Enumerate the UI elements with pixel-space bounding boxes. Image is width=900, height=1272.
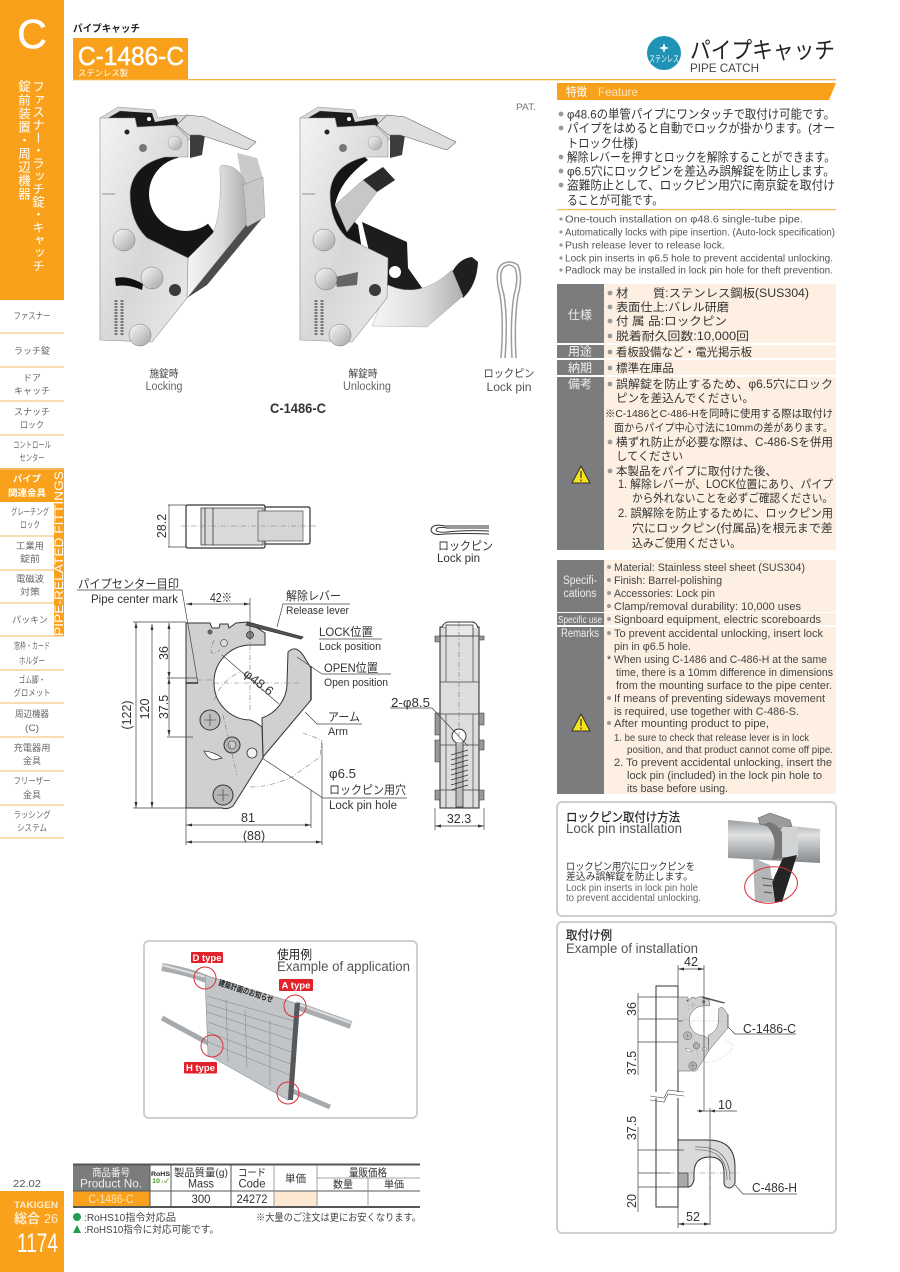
spec table english: To prevent accidental unlocking, insert lock (614, 628, 823, 640)
page title (690, 37, 835, 75)
sidebar navigation: 対策 (20, 586, 40, 597)
product category label: パイプキャッチ (73, 23, 140, 35)
spec table english: time, there is a 10mm difference in dimensions (616, 667, 833, 679)
photo captions: ロックピン (484, 367, 534, 380)
drawing: side view: 2-φ8.5 (391, 696, 430, 710)
footer page tab (0, 1191, 64, 1272)
callout: release lever (277, 589, 350, 627)
mini catch C-1486-C (678, 997, 732, 1071)
price table: 24272 (236, 1194, 268, 1206)
spec table english: Remarks (561, 628, 599, 640)
spec table japanese: ピンを差込んでください。 (616, 392, 754, 405)
table notes: ※大量のご注文は更にお安くなります。 (256, 1211, 421, 1224)
panel: installation example: 取付け例 (566, 928, 612, 942)
callout: open position: Open position (324, 677, 388, 689)
dimensions: 37.5 (625, 1116, 639, 1140)
panel: application example: Example of application (277, 959, 410, 974)
feature list japanese (559, 106, 835, 208)
photo captions: 施錠時 (150, 367, 179, 380)
spec table japanese (557, 284, 836, 550)
callout: pipe center mark: Pipe center mark (91, 592, 179, 606)
drawing: side view (390, 622, 484, 830)
callout: C-486-H: C-486-H (752, 1181, 797, 1195)
mounting board (650, 986, 686, 1207)
drawing: small lock pin: Lock pin (437, 551, 480, 565)
feature list japanese: 解除レバーを押すとロックを解除することができます。 (567, 150, 835, 164)
drawing: top view (155, 505, 316, 548)
dimensions: 36 (625, 1002, 639, 1016)
footer page tab: 1174 (17, 1228, 58, 1258)
drawing: front view with dimensions: (122) (120, 700, 134, 730)
sidebar navigation: グロメット (14, 687, 50, 698)
dimensions: 37.5 (625, 1051, 639, 1075)
callout: release lever: 解除レバー (286, 589, 341, 603)
sidebar navigation: ファスナー (14, 311, 50, 321)
sidebar navigation: 関連金具 (8, 487, 46, 498)
sidebar navigation: ドア (23, 373, 41, 383)
sidebar navigation: ロック (20, 520, 40, 530)
panel: lock pin installation: Lock pin inserts in lock pin hole (566, 883, 698, 894)
spec table japanese: 脱着耐久回数:10,000回 (616, 329, 749, 343)
callout: lock pin hole (262, 758, 407, 812)
sign board (205, 975, 300, 1100)
spec table english: Specific use (558, 615, 602, 626)
spec table japanese: 2. 誤解除を防止するために、ロックピン用 (618, 506, 833, 520)
sidebar navigation: フリーザー (14, 776, 50, 786)
sign board: 建築計画のお知らせ (217, 977, 275, 1005)
spec table japanese: 表面仕上:バレル研磨 (616, 300, 730, 314)
price table (73, 1164, 420, 1207)
sidebar navigation: 窓枠・カード (14, 640, 50, 651)
sidebar navigation: 周辺機器 (15, 708, 49, 719)
feature list japanese: パイプをはめると自動でロックが掛かります。(オー (567, 120, 835, 136)
callout: C-1486-C: C-1486-C (743, 1022, 796, 1036)
callout: arm: アーム (328, 710, 360, 724)
panel: lock pin installation (557, 802, 836, 916)
feature list japanese: 盗難防止として、ロックピン用穴に南京錠を取付け (567, 178, 835, 192)
callout: lock pin hole: Lock pin hole (329, 800, 397, 812)
feature header bar: 特徴 (566, 84, 587, 99)
dimensions: 10 (718, 1098, 732, 1112)
price table: 単価 (384, 1178, 404, 1191)
photo: unlocking state (190, 0, 478, 346)
photo captions: 解錠時 (348, 367, 378, 380)
spec table english: Material: Stainless steel sheet (SUS304) (614, 562, 805, 574)
spec table english: Specifi- (563, 575, 597, 587)
feature list english: One-touch installation on φ48.6 single-tube pipe. (565, 214, 803, 226)
feature list english: Padlock may be installed in lock pin hole for theft prevention. (565, 266, 833, 276)
price table: 300 (192, 1194, 210, 1206)
feature list japanese: ることが可能です。 (567, 192, 663, 208)
footer page tab: TAKIGEN (14, 1200, 58, 1211)
spec table japanese: してください (616, 450, 683, 463)
sidebar navigation: 金具 (23, 755, 41, 766)
type labels (184, 952, 313, 1074)
spec table english: Accessories: Lock pin (614, 588, 715, 600)
pipes (162, 965, 351, 1107)
icon: warning triangle (572, 466, 590, 483)
spec table english: pin in φ6.5 hole. (614, 641, 691, 653)
spec table japanese: 標準在庫品 (616, 361, 674, 375)
feature list english: Lock pin inserts in φ6.5 hole to prevent accidental unlocking. (565, 254, 833, 264)
drawing: front view with dimensions: (88) (243, 829, 265, 843)
panel: lock pin installation: Lock pin installation (566, 821, 682, 836)
photo captions (146, 102, 536, 416)
sidebar navigation: コントロール (13, 440, 51, 450)
panel: lock pin installation: 差込み誤解錠を防止します。 (566, 870, 693, 883)
callout: lock position (319, 625, 382, 653)
price table: Code (238, 1178, 266, 1190)
footer page tab: 総合 (14, 1211, 40, 1226)
spec table japanese: 納期 (568, 360, 592, 375)
drawing: front view with dimensions (120, 591, 322, 845)
drawing: front view with dimensions: 81 (241, 811, 255, 825)
spec table japanese: 穴にロックピン(付属品)を根元まで差 (632, 522, 833, 535)
sidebar navigation: ホルダー (19, 655, 45, 666)
price table: 製品質量(g) (174, 1166, 228, 1179)
spec table japanese: 本製品をパイプに取付けた後、 (616, 464, 777, 478)
photo captions: Unlocking (343, 381, 391, 393)
red detail circles (194, 967, 306, 1104)
sidebar navigation: (C) (25, 723, 39, 733)
panel: lock pin installation: to prevent accidental unlocking. (566, 893, 701, 904)
product number header: ステンレス製 (78, 68, 128, 78)
type labels: A type (282, 980, 310, 992)
spec table english: * When using C-1486 and C-486-H at the same (607, 654, 827, 666)
sidebar category tab: C (17, 11, 47, 57)
photo captions: PAT. (516, 102, 536, 113)
feature list english: Push release lever to release lock. (565, 240, 725, 252)
sidebar navigation: システム (17, 823, 47, 833)
price table: Product No. (80, 1178, 142, 1190)
spec table japanese: 横ずれ防止が必要な際は、C-486-Sを併用 (616, 435, 833, 449)
panel: installation example (557, 922, 836, 1233)
product number header: C-1486-C (78, 41, 184, 71)
sidebar navigation: ラッチ錠 (14, 346, 50, 356)
callout: lock position: LOCK位置 (319, 625, 373, 639)
feature list japanese: トロック仕様) (567, 136, 638, 150)
photo: lock pin (497, 262, 520, 358)
spec table japanese: 込みご使用ください。 (632, 536, 741, 550)
feature list japanese: φ48.6の単管パイプにワンタッチで取付け可能です。 (567, 106, 835, 122)
price table: RoHS (151, 1171, 171, 1178)
sidebar navigation: PIPE-RELATED FITTINGS (54, 471, 66, 636)
dimensions: 52 (686, 1210, 700, 1224)
drawing: front view with dimensions: 37.5 (157, 695, 171, 719)
callout: arm (305, 710, 362, 738)
spec table english: Clamp/removal durability: 10,000 uses (614, 601, 801, 613)
table notes (73, 1211, 421, 1236)
sidebar navigation (0, 311, 66, 838)
stainless badge (647, 36, 681, 70)
price table: C-1486-C (88, 1194, 134, 1206)
sidebar navigation: 金具 (23, 789, 41, 800)
price table: 単価 (285, 1172, 306, 1185)
feature list english: Automatically locks with pipe insertion. (Auto-lock specification) (565, 228, 835, 238)
table notes: :RoHS10指令に対応可能です。 (84, 1223, 219, 1236)
bracket C-486-H (670, 1140, 740, 1205)
price table: 商品番号 (92, 1166, 130, 1179)
price table: Mass (188, 1178, 214, 1190)
spec table japanese: 看板設備など・電光掲示板 (616, 345, 752, 359)
sidebar navigation: グレーチング (11, 506, 49, 517)
sidebar navigation: センター (20, 453, 44, 463)
callout: lock pin hole: φ6.5 (329, 767, 356, 781)
callout: release lever: Release lever (286, 605, 349, 617)
drawing: front view with dimensions: 120 (138, 699, 152, 719)
sidebar navigation: 錠前 (20, 553, 40, 564)
drawing: top view: 28.2 (155, 514, 169, 538)
price table: 10↓✓ (152, 1178, 170, 1185)
feature header bar: Feature (598, 85, 638, 99)
table notes: :RoHS10指令対応品 (84, 1211, 176, 1224)
spec table japanese: 付 属 品:ロックピン (616, 315, 727, 328)
panel: installation example: Example of installation (566, 941, 698, 956)
icon: warning triangle (572, 714, 590, 731)
spec table japanese: 誤解錠を防止するため、φ6.5穴にロック (616, 377, 833, 391)
panel: application example (144, 941, 417, 1118)
feature header bar (557, 83, 836, 100)
sidebar navigation: 充電器用 (14, 743, 50, 753)
price table: 量販価格 (349, 1166, 387, 1179)
price table: コード (238, 1167, 266, 1179)
dimensions: 20 (625, 1194, 639, 1208)
callout: pipe center mark (77, 577, 198, 683)
dimensions: 42 (684, 955, 698, 969)
callout: lock pin hole: ロックピン用穴 (329, 783, 406, 797)
stainless badge: ステンレス (649, 54, 679, 64)
spec table japanese: 用途 (568, 344, 592, 358)
sidebar category tab: 錠前装置・周辺機器 (16, 80, 30, 200)
panel: lock pin installation: ロックピン用穴にロックピンを (566, 861, 695, 873)
spec table english: If means of preventing sideways movement (614, 693, 826, 705)
feature list japanese: φ6.5穴にロックピンを差込み誤解錠を防止します。 (567, 164, 835, 178)
spec table japanese: 仕様 (568, 308, 592, 322)
sidebar navigation: スナッチ (14, 407, 50, 417)
callout: lock position: Lock position (319, 641, 381, 653)
spec table english: position, and that product cannot come off pipe. (627, 745, 833, 756)
sidebar navigation: ロック (20, 420, 44, 430)
spec table japanese: ※C-1486とC-486-Hを同時に使用する際は取付け (605, 407, 833, 420)
callout: arm: Arm (328, 726, 348, 738)
sidebar navigation: 工業用 (16, 540, 44, 551)
page title: PIPE CATCH (690, 61, 759, 75)
sidebar navigation: パイプ (13, 474, 41, 484)
panel: application example: 使用例 (277, 947, 312, 962)
drawing: small lock pin: ロックピン (438, 539, 493, 553)
photo: locking state (100, 107, 265, 346)
spec table english: Signboard equipment, electric scoreboards (614, 614, 821, 626)
date code: 22.02 (13, 1178, 41, 1190)
drawing: side view: 32.3 (447, 812, 471, 826)
callout: open position: OPEN位置 (324, 661, 378, 675)
type labels: D type (192, 953, 222, 964)
sidebar category tab: ファスナー・ラッチ錠・キャッチ (30, 80, 44, 272)
footer page tab: 26 (44, 1211, 58, 1226)
drawing: front view with dimensions: φ48.6 (241, 666, 276, 698)
spec table japanese: 材 質:ステンレス鋼板(SUS304) (616, 286, 809, 300)
photo captions: Lock pin (486, 380, 532, 394)
product number header (73, 38, 188, 80)
spec table japanese: 備考 (568, 377, 592, 391)
spec table english: its base before using. (627, 783, 728, 795)
spec table english: Finish: Barrel-polishing (614, 575, 722, 587)
photo: pipe with lock pin (728, 813, 820, 907)
spec table english (557, 560, 836, 795)
price table: 数量 (333, 1178, 353, 1191)
dimensions (625, 955, 737, 1228)
spec table english: After mounting product to pipe, (614, 718, 769, 730)
sidebar navigation: ゴム脚・ (18, 674, 46, 685)
drawing: front view with dimensions: 36 (157, 646, 171, 660)
drawing: front view with dimensions: 42※ (210, 591, 232, 605)
sidebar category tab (0, 0, 64, 300)
sidebar navigation: キャッチ (14, 386, 50, 396)
feature list english (559, 214, 835, 276)
sidebar navigation: ラッシング (14, 809, 50, 820)
photo captions: C-1486-C (270, 401, 326, 416)
spec table english: cations (564, 588, 597, 600)
callout: pipe center mark: パイプセンター目印 (78, 577, 179, 591)
panel: lock pin installation: ロックピン取付け方法 (566, 810, 680, 824)
type labels: H type (186, 1063, 215, 1074)
spec table english: is required, use together with C-486-S. (614, 706, 799, 718)
sidebar navigation: 電磁波 (16, 573, 44, 584)
sidebar navigation: パッキン (12, 615, 48, 625)
spec table japanese: から外れないことを必ずご確認ください。 (632, 491, 833, 505)
callout: open position (297, 657, 391, 689)
spec table english: 1. be sure to check that release lever is in lock (614, 733, 810, 744)
photo captions: Locking (146, 381, 182, 393)
drawing: small lock pin (431, 525, 493, 565)
spec table english: from the mounting surface to the pipe center. (616, 680, 832, 692)
spec table japanese: 1. 解除レバーが、LOCK位置にあり、パイプ (618, 477, 833, 491)
spec table japanese: 面からパイプ中心寸法に10mmの差があります。 (614, 421, 833, 434)
spec table english: 2. To prevent accidental unlocking, insert the (614, 757, 832, 769)
page title: パイプキャッチ (690, 37, 835, 63)
spec table english: lock pin (included) in the lock pin hole to (627, 770, 822, 782)
